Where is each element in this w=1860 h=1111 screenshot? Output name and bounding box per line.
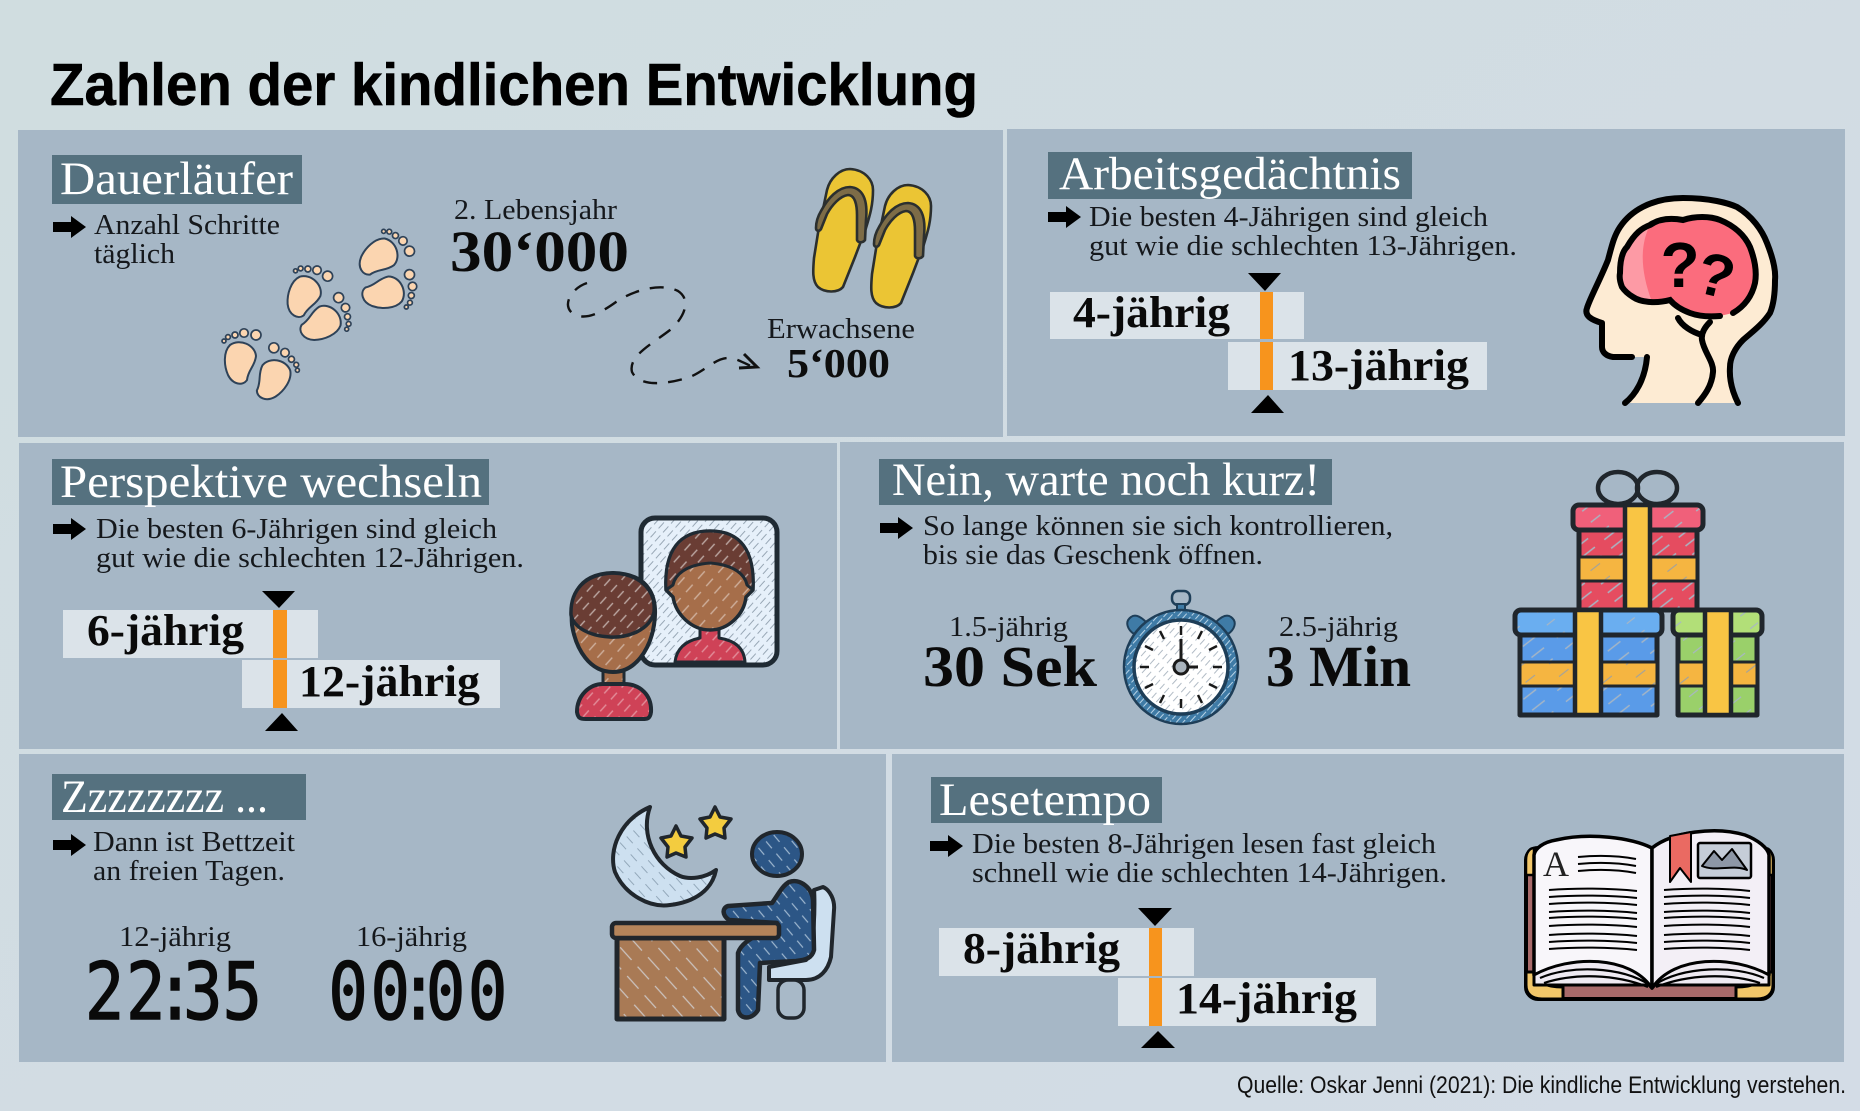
arrow: dashed path <box>568 283 757 383</box>
arrow <box>53 518 86 540</box>
comparison bars: 6-jährig vs 12-jährig <box>63 591 500 731</box>
icon: flip-flops <box>813 169 931 308</box>
icon: moon, stars and person at desk <box>612 807 834 1019</box>
comparison bars: 6-jährig vs 12-jährig: 12-jährig <box>299 657 480 706</box>
stat: 2.5-jährig 3 Min: 3 Min <box>1266 634 1411 699</box>
panel: Lesetempo <box>892 754 1844 1062</box>
text: Anzahl Schritte täglich: täglich <box>94 238 176 270</box>
arrow <box>1048 206 1081 228</box>
panel: Nein, warte noch kurz! <box>840 442 1844 749</box>
icon: child looking in mirror <box>571 518 777 719</box>
heading: Arbeitsgedächtnis: Arbeitsgedächtnis <box>1059 148 1401 200</box>
icon: head with brain and question marks: ? <box>1660 229 1700 301</box>
icon: open book <box>1526 831 1773 999</box>
arrow <box>930 835 963 857</box>
icon: head with brain and question marks <box>1586 198 1775 403</box>
stat: 16-jährig 00:00: 00:00 <box>328 946 507 1037</box>
stat: 1.5-jährig 30 Sek <box>923 611 1098 699</box>
text: description: Die besten 4-Jährigen sind gleich <box>1089 201 1489 233</box>
comparison bars: 8-jährig vs 14-jährig <box>939 908 1376 1048</box>
comparison bars: 4-jährig vs 13-jährig <box>1050 273 1487 413</box>
stat: 1.5-jährig 30 Sek: 1.5-jährig <box>949 611 1068 643</box>
stat: 2.5-jährig 3 Min: 2.5-jährig <box>1279 611 1398 643</box>
stat: Erwachsene 5'000 <box>767 313 915 386</box>
heading: Perspektive wechseln: Perspektive wechseln <box>60 456 482 508</box>
text: description: gut wie die schlechten 12-Jährigen. <box>96 542 524 574</box>
text: description <box>923 510 1393 571</box>
stat: 2. Lebensjahr 30'000: 30‘000 <box>450 219 629 284</box>
text: description: So lange können sie sich kontrollieren, <box>923 510 1393 542</box>
panel: Arbeitsgedächtnis <box>1007 129 1845 436</box>
stat: 12-jährig 22:35: 22:35 <box>85 946 262 1037</box>
stat: Erwachsene 5'000: 5‘000 <box>787 340 890 386</box>
text: description: Die besten 8-Jährigen lesen fast gleich <box>972 828 1437 860</box>
comparison bars: 4-jährig vs 13-jährig: 13-jährig <box>1288 341 1469 390</box>
heading: Lesetempo: Lesetempo <box>939 774 1151 826</box>
icon: stopwatch <box>1124 591 1238 724</box>
text: Anzahl Schritte täglich <box>94 209 280 270</box>
stat: Erwachsene 5'000: Erwachsene <box>767 313 915 345</box>
text: description: bis sie das Geschenk öffnen. <box>923 539 1263 571</box>
icon: open book: A <box>1543 844 1569 884</box>
text: Anzahl Schritte täglich: Anzahl Schritte <box>94 209 280 241</box>
arrow <box>53 834 86 856</box>
panel: Zzzzzzzz <box>19 754 886 1062</box>
icon: baby footprints <box>222 222 419 407</box>
icon: stacked gifts <box>1515 472 1762 715</box>
arrow <box>880 517 913 539</box>
heading: Dauerläufer: Dauerläufer <box>60 153 293 205</box>
text: description: gut wie die schlechten 13-Jährigen. <box>1089 230 1517 262</box>
stat: 1.5-jährig 30 Sek: 30 Sek <box>923 634 1098 699</box>
panel: Perspektive wechseln <box>19 443 837 749</box>
text: description: an freien Tagen. <box>93 855 285 887</box>
stat: 12-jährig 22:35: 12-jährig <box>119 921 231 953</box>
heading: Nein, warte noch kurz!: Nein, warte noch kurz! <box>892 454 1320 506</box>
stat: 2. Lebensjahr 30'000 <box>450 194 629 284</box>
arrow <box>53 216 86 238</box>
comparison bars: 6-jährig vs 12-jährig: 6-jährig <box>87 606 244 655</box>
text: description <box>93 826 295 887</box>
comparison bars: 4-jährig vs 13-jährig: 4-jährig <box>1073 288 1230 337</box>
icon: head with brain and question marks: ? <box>1690 239 1742 312</box>
text: description: schnell wie die schlechten 14-Jährigen. <box>972 857 1447 889</box>
text: description <box>96 513 524 574</box>
text: description: Die besten 6-Jährigen sind gleich <box>96 513 498 545</box>
text: description <box>972 828 1447 889</box>
comparison bars: 8-jährig vs 14-jährig: 14-jährig <box>1176 974 1357 1023</box>
title: Zahlen der kindlichen Entwicklung <box>50 52 978 118</box>
panel: Dauerläufer <box>18 130 1003 437</box>
text: description: Dann ist Bettzeit <box>93 826 295 858</box>
text: description <box>1089 201 1517 262</box>
stat: 2. Lebensjahr 30'000: 2. Lebensjahr <box>454 194 617 226</box>
comparison bars: 8-jährig vs 14-jährig: 8-jährig <box>963 924 1120 973</box>
stat: 16-jährig 00:00: 16-jährig <box>356 921 467 953</box>
heading: Zzzzzzzz ...: Zzzzzzzz ... <box>61 771 268 823</box>
